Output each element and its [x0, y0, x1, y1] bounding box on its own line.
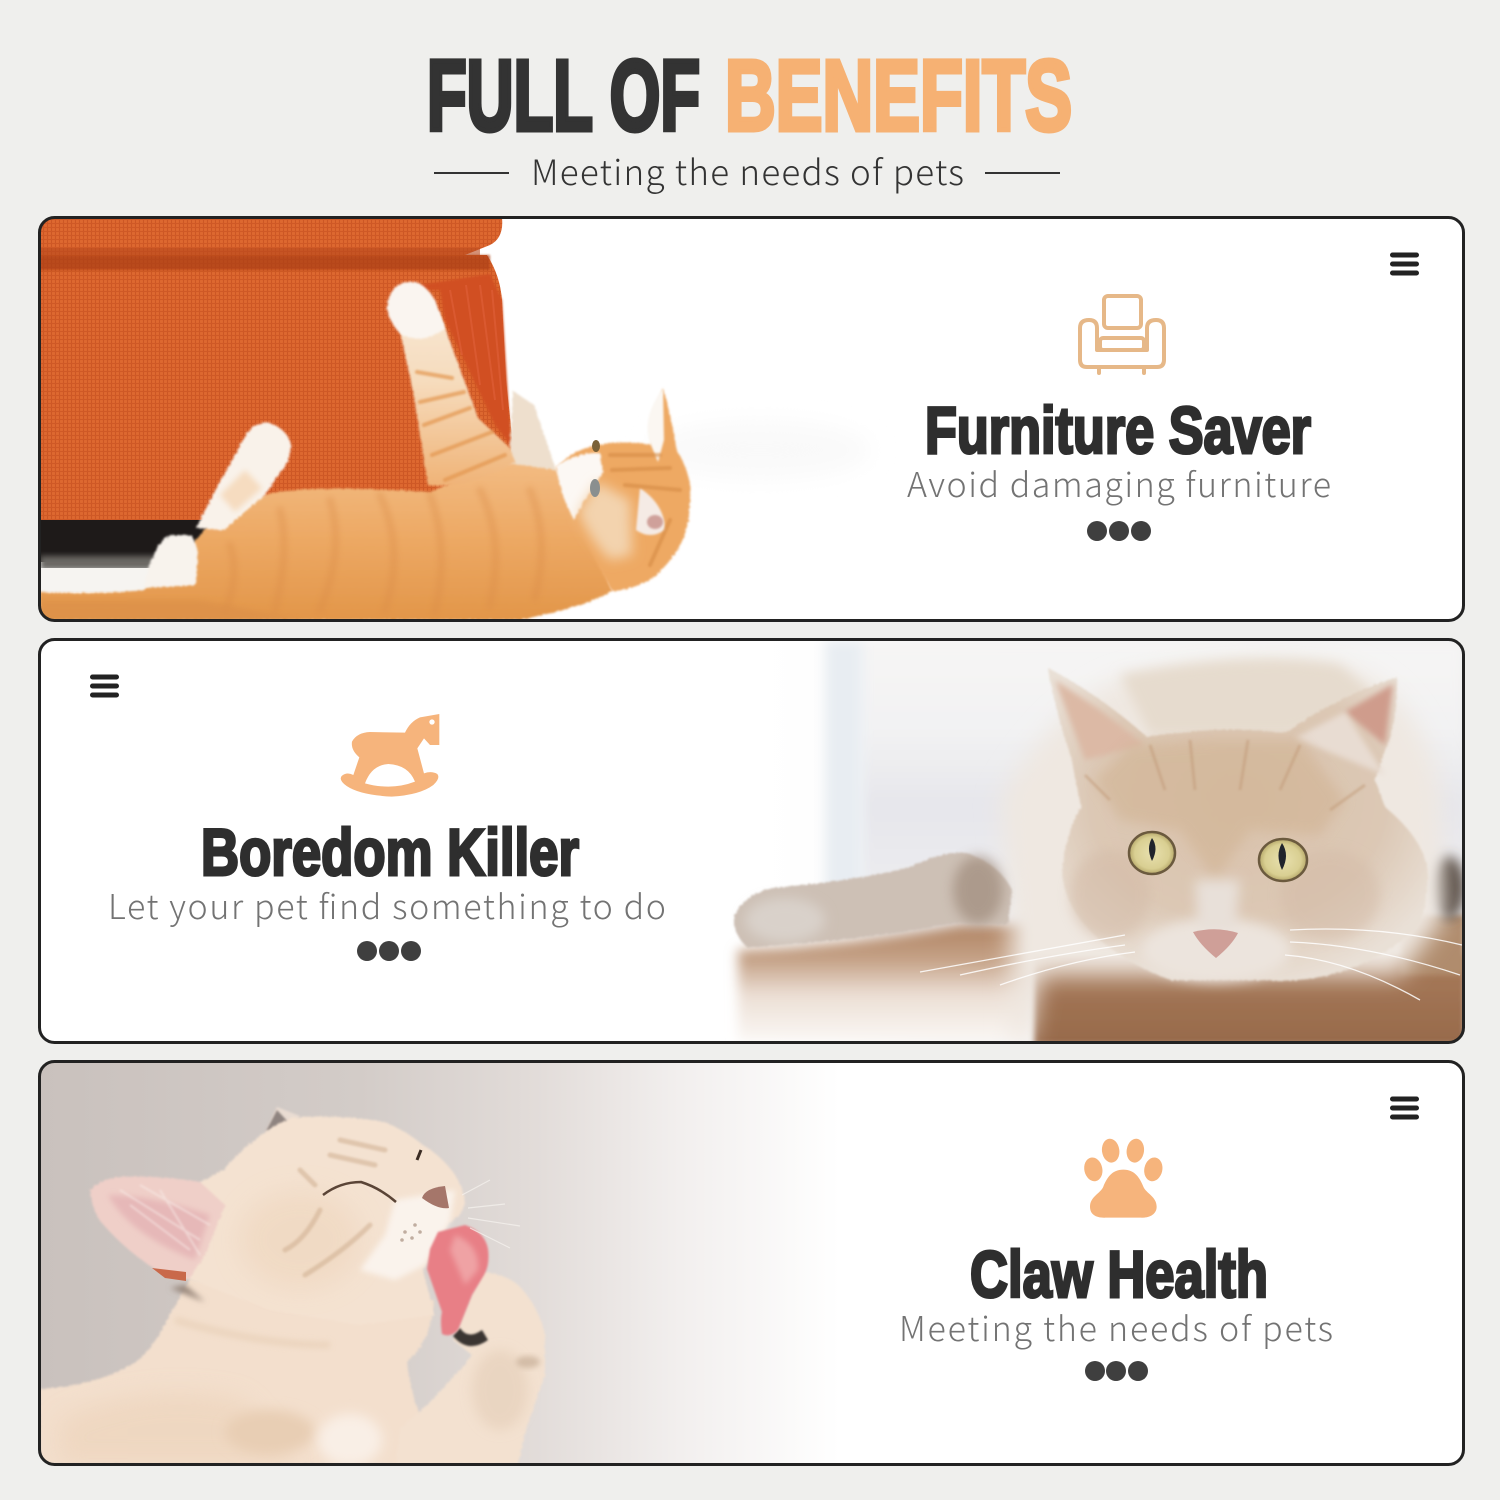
- photo: kitten licking paw: [41, 1063, 764, 1463]
- kitten paw and arm: [419, 1272, 545, 1463]
- wood floor, left reflection: [738, 925, 1030, 1042]
- cat head: [1048, 668, 1428, 981]
- icon: menu: [1392, 1099, 1416, 1117]
- kitten body: [40, 1279, 440, 1464]
- panel frame: [40, 640, 1464, 1042]
- heading: claw health: Claw Health: [970, 1237, 1268, 1311]
- cat raised paw: [387, 282, 445, 339]
- icon: rocking horse: [341, 714, 439, 797]
- text: boredom killer description: Let your pet find something to do: [108, 880, 666, 929]
- panel frame: [40, 218, 1464, 620]
- photo: orange cat scratching sofa: [40, 218, 870, 620]
- title: BENEFITS: [725, 40, 1072, 152]
- photo: cream cat lying on floor: [734, 640, 1465, 1045]
- panel: claw health: [39, 1061, 1464, 1466]
- whiskers: [920, 929, 1462, 1000]
- kitten ear: [90, 1177, 225, 1279]
- tongue: [427, 1225, 488, 1335]
- kitten head: [186, 1116, 466, 1316]
- whiskers: [462, 1180, 520, 1248]
- wood floor, right: [1034, 955, 1465, 1045]
- cat body: [40, 462, 612, 620]
- sofa body: [40, 255, 513, 520]
- frayed fringe: [422, 274, 512, 442]
- cat nose: [1193, 929, 1238, 958]
- heading: furniture saver: Furniture Saver: [925, 393, 1311, 467]
- icon: menu: [92, 677, 116, 695]
- cat rear leg: [196, 423, 291, 530]
- dots: [1087, 521, 1151, 541]
- cat foreleg: [734, 853, 1012, 948]
- title: FULL OF: [427, 40, 700, 152]
- sofa cushion: [40, 218, 502, 255]
- panel: boredom killer: [39, 639, 1465, 1045]
- cat rear foot: [144, 535, 198, 588]
- icon: armchair: [1080, 296, 1164, 373]
- text: furniture saver description: Avoid damaging furniture: [907, 458, 1331, 507]
- nose: [422, 1186, 449, 1208]
- dots: [357, 941, 421, 961]
- panel frame: [40, 1062, 1464, 1464]
- panel: furniture saver: [39, 217, 1464, 621]
- text: claw health description: Meeting the needs of pets: [899, 1302, 1333, 1351]
- cat head: [556, 388, 690, 591]
- closed eye: [323, 1182, 396, 1202]
- title: [427, 40, 1072, 152]
- dots: [1085, 1361, 1148, 1381]
- icon: menu: [1392, 255, 1416, 273]
- cat far foreleg: [508, 390, 556, 472]
- cat eyes: [1129, 832, 1307, 881]
- kitten far ear: [269, 1107, 300, 1124]
- cat flank and back: [1000, 660, 1445, 1042]
- subtitle with side rules: Meeting the needs of pets: [531, 145, 964, 196]
- heading: boredom killer: Boredom Killer: [201, 815, 579, 889]
- icon: paw: [1082, 1138, 1165, 1218]
- cat raised foreleg: [400, 311, 515, 486]
